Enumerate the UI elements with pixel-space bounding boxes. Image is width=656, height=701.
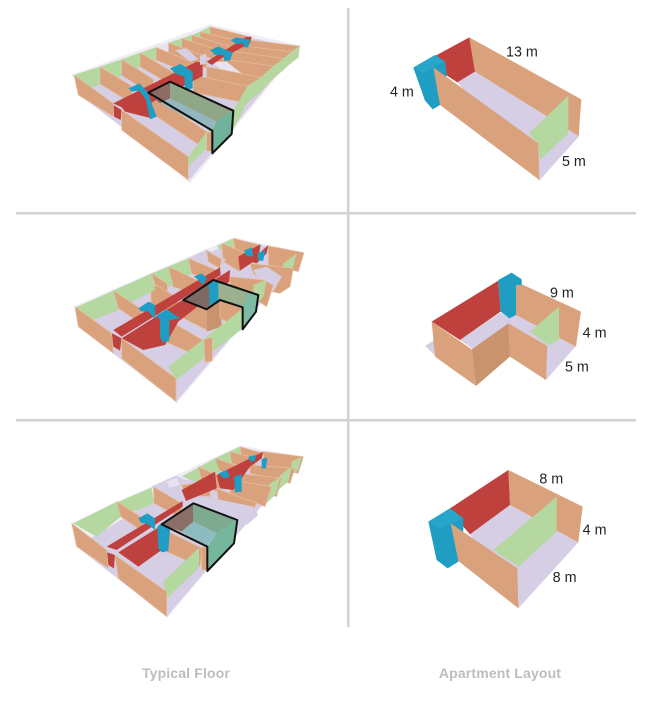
service corridor floor 1: [113, 37, 252, 120]
floor: [470, 505, 578, 608]
service corridor floor 2: [111, 244, 268, 351]
panel: typical floor 1: [71, 24, 302, 183]
shaft: [498, 273, 522, 318]
front wall floor 2: [75, 307, 176, 402]
green partition: [529, 96, 568, 160]
outer floor: [425, 340, 437, 357]
panel: apartment layout 1: [390, 37, 586, 181]
left wing rooms floor 2: [76, 238, 260, 324]
right wing rooms floor 2: [165, 246, 304, 380]
dimension: 4 m: 4 m: [583, 522, 607, 538]
front wall: [433, 67, 539, 180]
green partition: [493, 497, 557, 567]
green partition: [530, 307, 559, 345]
shafts floor 1: [129, 37, 250, 119]
caption: typical floor: Typical Floor: [142, 665, 230, 681]
back wall: [469, 37, 581, 136]
panel: typical floor 2: [73, 237, 305, 403]
right wing rooms floor 1: [147, 39, 299, 167]
dimension: 8 m top: 8 m: [539, 471, 563, 487]
red wall: [450, 470, 510, 534]
right wing rooms floor 3: [163, 452, 303, 598]
dimension: 5 m: 5 m: [562, 154, 586, 170]
floor: [457, 72, 579, 181]
dimension: 9 m: 9 m: [550, 285, 574, 301]
dimension: 13 m: 13 m: [506, 45, 538, 61]
shafts floor 3: [138, 455, 267, 552]
panel: apartment layout 2: [425, 273, 607, 386]
panel: apartment layout 3: [428, 470, 607, 608]
shaft: [413, 55, 447, 109]
left wing rooms floor 3: [73, 447, 263, 537]
dimension: 8 m bottom: 8 m: [553, 570, 577, 586]
highlighted apartment floor 3: [162, 503, 237, 571]
back wall: [508, 470, 583, 542]
shaft: [428, 508, 463, 568]
outer walls: [432, 322, 547, 386]
dimension: 5 m: 5 m: [565, 360, 589, 376]
shafts floor 2: [138, 247, 265, 343]
panel: typical floor 3: [71, 446, 304, 618]
highlighted apartment floor 1: [148, 82, 233, 153]
highlighted apartment floor 2: [183, 280, 258, 329]
caption: apartment layout: Apartment Layout: [439, 665, 561, 681]
service corridor floor 3: [105, 452, 263, 568]
dimension: 4 m: 4 m: [390, 85, 414, 101]
front wall floor 1: [74, 75, 188, 180]
back wall: [516, 282, 581, 347]
left wing rooms floor 1: [74, 27, 247, 103]
front wall: [451, 523, 518, 608]
dimension: 4 m: 4 m: [583, 325, 607, 341]
front wall floor 3: [72, 523, 167, 617]
red wall: [435, 37, 475, 82]
red wall: [432, 281, 501, 340]
floor: [460, 313, 576, 380]
